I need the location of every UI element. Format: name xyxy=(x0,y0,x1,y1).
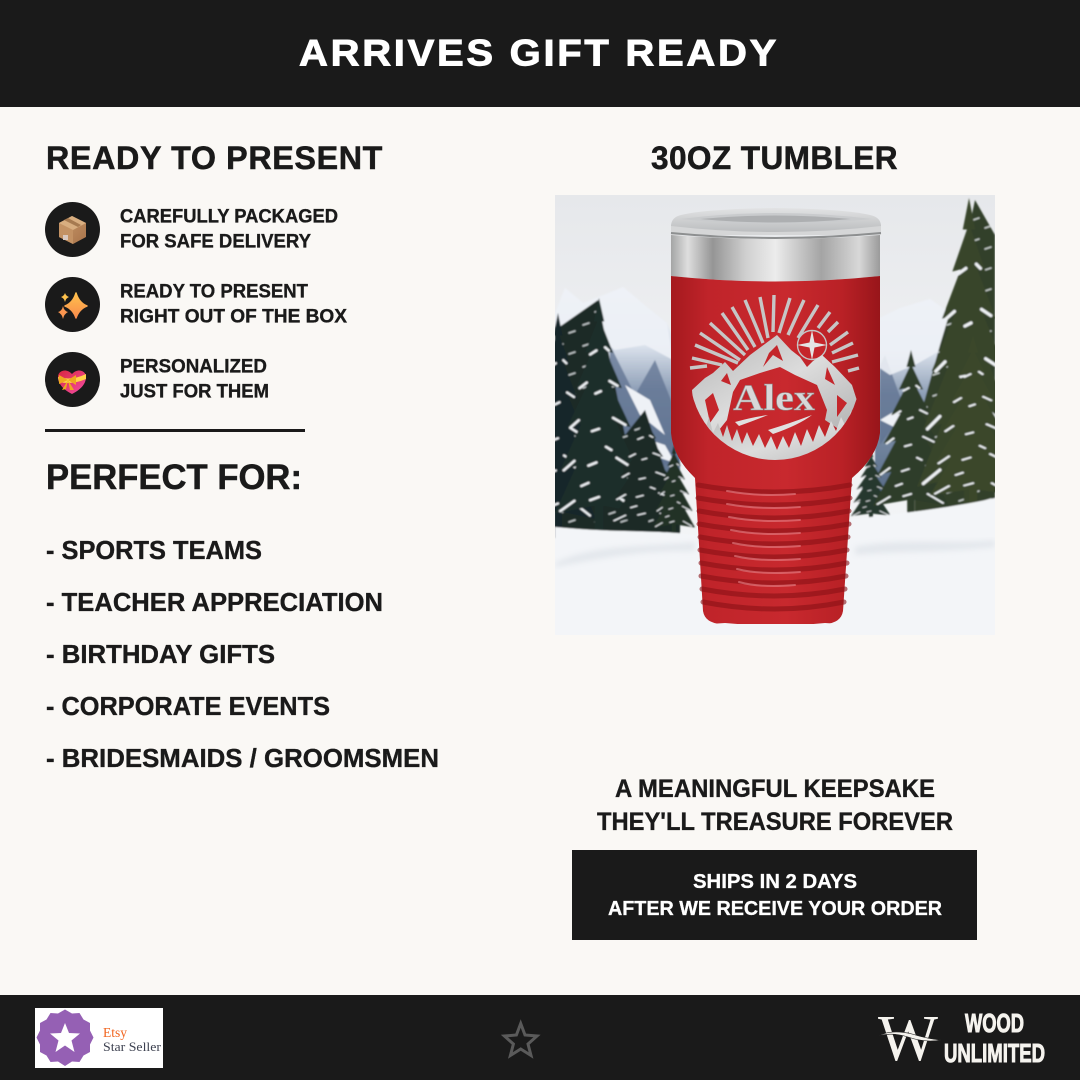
product photo: red tumbler in snow xyxy=(555,195,995,624)
icon: package box xyxy=(45,202,100,257)
keepsake message xyxy=(597,775,953,836)
shipping callout xyxy=(572,850,977,940)
icon: gift heart xyxy=(45,352,100,407)
text: personalized: JUST FOR THEM xyxy=(120,382,269,402)
icon: outline star xyxy=(504,1024,537,1056)
keepsake message: THEY'LL TREASURE FOREVER xyxy=(597,808,953,836)
tumbler xyxy=(671,208,881,624)
snow at base xyxy=(717,623,831,624)
icon: purple scalloped star badge xyxy=(36,1010,94,1066)
list: perfect for: - CORPORATE EVENTS xyxy=(46,693,330,721)
text: ready to present: RIGHT OUT OF THE BOX xyxy=(120,306,347,328)
list: perfect for: - BRIDESMAIDS / GROOMSMEN xyxy=(46,745,439,773)
ridges xyxy=(698,485,850,609)
red body xyxy=(671,276,880,624)
text: carefully packaged: CAREFULLY PACKAGED xyxy=(120,206,338,228)
shipping callout: AFTER WE RECEIVE YOUR ORDER xyxy=(608,898,943,920)
steel rim xyxy=(671,235,880,282)
text: ready to present xyxy=(120,282,347,328)
badge: etsy star seller: Etsy xyxy=(103,1026,127,1041)
icon: sparkles xyxy=(45,277,100,332)
evergreen forest xyxy=(555,198,995,538)
list: perfect for: - TEACHER APPRECIATION xyxy=(46,589,383,617)
text: personalized: PERSONALIZED xyxy=(120,356,267,378)
feature: personalized xyxy=(45,352,269,407)
list: perfect for xyxy=(46,537,439,773)
text: personalized xyxy=(120,356,269,402)
shipping callout: SHIPS IN 2 DAYS xyxy=(693,871,857,893)
logo: wood unlimited xyxy=(878,1002,1045,1075)
feature list xyxy=(45,202,347,407)
sun rays xyxy=(690,295,859,371)
heading: 30oz tumbler: 30OZ TUMBLER xyxy=(651,140,898,176)
distant mountains xyxy=(555,289,949,492)
feature: ready to present xyxy=(45,277,347,332)
heading: ready to present: READY TO PRESENT xyxy=(46,140,383,176)
badge: etsy star seller: Star Seller xyxy=(103,1039,162,1054)
snow ground xyxy=(555,496,995,542)
heading: perfect for: PERFECT FOR: xyxy=(46,458,302,497)
lid xyxy=(671,208,881,238)
header band xyxy=(0,0,1080,107)
footer band xyxy=(0,995,1080,1080)
engraved name: Alex xyxy=(733,378,816,419)
snow shadows xyxy=(558,541,994,565)
text: carefully packaged: FOR SAFE DELIVERY xyxy=(120,232,311,252)
feature: carefully packaged xyxy=(45,202,338,257)
keepsake message: A MEANINGFUL KEEPSAKE xyxy=(615,775,935,803)
list: perfect for: - BIRTHDAY GIFTS xyxy=(46,641,275,669)
engraved logo xyxy=(690,295,860,460)
badge: etsy star seller xyxy=(35,1008,163,1068)
list: perfect for: - SPORTS TEAMS xyxy=(46,537,262,565)
text: ready to present: READY TO PRESENT xyxy=(120,282,308,302)
mountain and forest disc xyxy=(692,335,856,460)
text: carefully packaged xyxy=(120,206,338,252)
logo: wood unlimited: WOOD xyxy=(965,1008,1024,1038)
compass xyxy=(797,330,827,360)
logo mark: W: W xyxy=(878,1002,939,1075)
title: ARRIVES GIFT READY xyxy=(299,32,779,74)
